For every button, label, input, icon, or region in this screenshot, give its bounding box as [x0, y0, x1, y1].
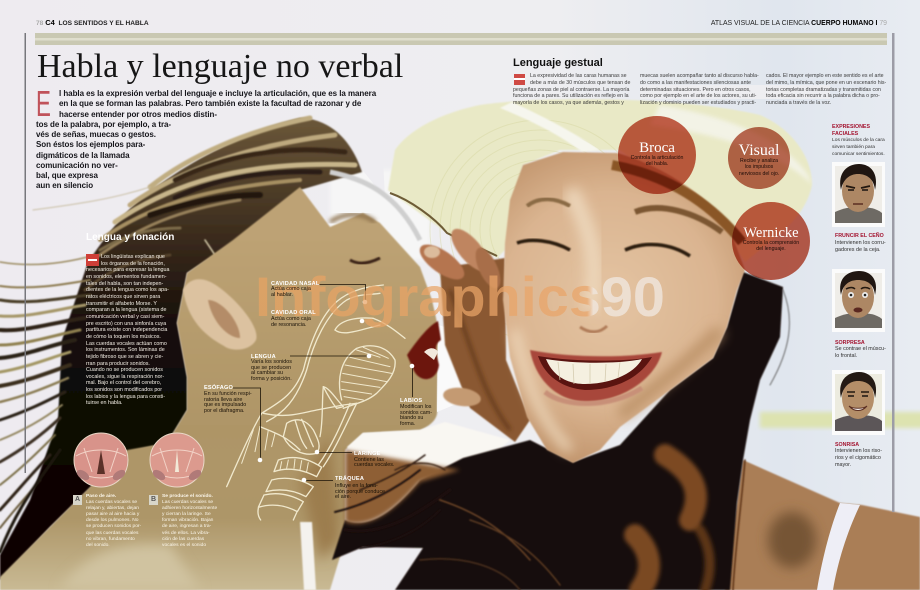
name: LABIOS	[400, 398, 422, 404]
description	[835, 240, 886, 253]
text column 1: mayoría de los casos, ya que además, gestos y	[513, 100, 624, 106]
body text: Cuando no se producen sonidos	[86, 367, 163, 373]
caption: fruncir el ceño	[835, 232, 886, 253]
description: ción porque conduce	[335, 489, 385, 495]
name: LENGUA	[251, 354, 276, 360]
name: ESÓFAGO	[204, 385, 233, 391]
left woman: face and neck	[0, 172, 510, 590]
right woman: hat	[330, 85, 830, 340]
text column 3: del mimo, la mímica, que pone en un escenario his-	[766, 80, 886, 86]
lips	[407, 321, 441, 379]
description: cuerdas vocales.	[354, 462, 394, 468]
caption: sorpresa	[835, 340, 887, 362]
description: Recibe y analiza	[740, 158, 778, 164]
text: vocales es el sonido	[162, 543, 206, 548]
intro text: aun en silencio	[36, 181, 93, 190]
sidebar heading: FACIALES	[832, 131, 858, 137]
heading: Lengua y fonación	[86, 232, 174, 243]
hair strands brown	[635, 455, 710, 590]
icon: red arrow square	[86, 254, 99, 266]
hat band	[612, 165, 742, 242]
text column 3: torias completas dramatizadas y transmitidas con	[766, 87, 881, 93]
header left: 78 C4 LOS SENTIDOS Y EL HABLA	[36, 18, 149, 27]
anatomy label: laringe	[354, 451, 394, 468]
name: SONRISA	[835, 442, 859, 448]
body text: Las cuerdas vocales actúan como	[86, 341, 167, 347]
icon: letter B: B	[151, 496, 156, 503]
panel: lengua y fonación	[86, 232, 174, 406]
description	[271, 286, 311, 298]
text column 2: como por ejemplo en el arte de los actores, su uti-	[640, 93, 756, 99]
white gaps	[437, 325, 466, 412]
description: de resonancia.	[271, 322, 306, 328]
description: Influye en la fona-	[335, 483, 378, 489]
leader lines and dots	[233, 284, 414, 482]
photo: smiling man	[832, 370, 885, 435]
text: ción de las cuerdas	[162, 537, 204, 542]
intro text: comunicación no ver-	[36, 161, 118, 170]
text column 1: pequeñas zonas de piel al contraerse. La mayoría	[513, 87, 629, 93]
description	[271, 316, 311, 328]
text column 1: La expresividad de las caras humanas se	[530, 73, 627, 79]
text column 1: funciona de a pares. Su utilización es reflejo en la	[513, 93, 629, 99]
body text: pre escrito) con una sinfonía cuya	[86, 321, 166, 327]
body text: transmitir el alfabeto Morse. Y	[86, 301, 157, 307]
description: Controla la articulación	[631, 155, 683, 161]
description	[335, 483, 385, 500]
closed eye and brow	[350, 258, 380, 263]
header right: ATLAS VISUAL DE LA CIENCIA CUERPO HUMANO I 79	[711, 20, 887, 27]
text: y cierran la laringe. Se	[162, 512, 211, 517]
text: vés de ellos. La vibra-	[162, 531, 210, 536]
description: que es impulsado	[204, 402, 246, 408]
text: pasar aire al aire hacia y	[86, 512, 139, 517]
silver hair over forehead	[330, 172, 420, 240]
description: Actúa como caja	[271, 316, 311, 322]
body text: Los lingüistas explican que	[101, 254, 165, 260]
name: SORPRESA	[835, 340, 865, 346]
text: del sonido.	[86, 543, 110, 548]
body text: vocales, sigue la respiración nor-	[86, 374, 164, 380]
page frame rules	[24, 33, 894, 512]
text column 2: lización y dominio pueden ser estudiados y practi-	[640, 100, 756, 106]
description: ratoria lleva aire	[204, 397, 242, 403]
throat circle A: open vocal cords	[74, 433, 128, 487]
heading: Lenguaje gestual	[513, 57, 603, 69]
body text: en sonidos, elementos fundamen-	[86, 274, 167, 280]
anatomy drawing: vocal tract	[227, 285, 405, 520]
text: desde los pulmones. No	[86, 518, 138, 523]
description: mayor.	[835, 462, 851, 468]
left woman: wind-blown strands	[0, 255, 95, 552]
panel: lenguaje gestual	[513, 57, 886, 106]
body text: los sonidos son modificados por	[86, 387, 162, 393]
sidebar heading: EXPRESIONES	[832, 124, 870, 130]
text: Paso de aire.	[86, 494, 116, 499]
text: de aire, ingresan a tra-	[162, 524, 211, 529]
body text: tejido fibroso que se abren y cie-	[86, 354, 163, 360]
caption: sonrisa	[835, 442, 887, 471]
body text: los instrumentos. Son láminas de	[86, 347, 165, 353]
description: forma y posición.	[251, 376, 292, 382]
white strap	[300, 522, 316, 590]
text: adhieren horizontalmente	[162, 506, 217, 511]
body text: dientes de la lengua como los apa-	[86, 287, 169, 293]
intro text: en la que se forman las palabras. Pero también existe la facultad de razonar y de	[59, 99, 361, 108]
description: sonidos cam-	[400, 410, 432, 416]
text: no vibran, fundamento	[86, 537, 135, 542]
description: el aire.	[335, 494, 351, 500]
anatomy label: cavidad nasal	[271, 281, 320, 298]
body text	[86, 254, 170, 406]
photo: frowning man	[832, 162, 885, 227]
description: Controla la comprensión	[743, 240, 799, 246]
body text: rran para producir sonidos.	[86, 360, 150, 366]
text column 3: cados. El mayor ejemplo en este sentido es el arte	[766, 73, 884, 79]
body text: tales del habla, son tan indepen-	[86, 281, 163, 287]
right woman: face, hand and hair	[332, 152, 920, 590]
body text: comparan a la lengua (sistema de	[86, 307, 166, 313]
description	[630, 155, 684, 167]
circle label: Visual	[738, 142, 780, 177]
description: Modifican los	[400, 404, 431, 410]
anatomy label: lengua	[251, 354, 292, 382]
name: LARINGE	[354, 451, 381, 457]
description: que se producen	[251, 365, 291, 371]
text column 2: do como a las manifestaciones silenciosas ante	[640, 80, 751, 86]
text: Las cuerdas vocales se	[162, 500, 213, 505]
drop cap: E	[36, 83, 51, 124]
icon: red arrow square	[514, 74, 525, 85]
description	[400, 404, 432, 427]
text: Las cuerdas vocales se	[86, 500, 137, 505]
description: En su función respi-	[204, 391, 252, 397]
text: Se produce el sonido.	[162, 494, 213, 499]
text column 3	[766, 73, 886, 106]
photo: surprised man	[832, 269, 885, 332]
text column 2	[640, 73, 759, 106]
description: al hablar.	[271, 292, 293, 298]
circle label: Wernicke	[743, 225, 799, 252]
body text: necesarios para expresar la lengua	[86, 267, 169, 273]
name: Broca	[639, 140, 675, 156]
name: FRUNCIR EL CEÑO	[835, 233, 884, 239]
description: del habla.	[646, 161, 668, 167]
icon: letter A	[73, 495, 82, 505]
body text: los órganos de la fonación,	[101, 261, 165, 267]
description: Contiene las	[354, 456, 384, 462]
text: forman vibración. Bajan	[162, 518, 213, 523]
body text: los labios y la lengua para consti-	[86, 394, 165, 400]
icon: letter B	[149, 495, 158, 505]
description: del lenguaje.	[756, 246, 786, 252]
text column 3: toda eficacia sin recurrir a la palabra dicha o pro-	[766, 93, 880, 99]
body text: comunicación verbal y casi siem-	[86, 314, 164, 320]
body text: mal. Bajo el control del cerebro,	[86, 380, 161, 386]
text column 3: nunciada a través de la voz.	[766, 100, 831, 106]
ear	[183, 279, 257, 350]
text column 1	[513, 73, 630, 106]
intro text: hacerse entender por otros medios distin-	[59, 110, 217, 118]
name: CAVIDAD NASAL	[271, 281, 320, 287]
description: gadores de la ceja.	[835, 247, 881, 253]
sidebar intro: sirven también para	[832, 145, 875, 150]
description: forma.	[400, 421, 415, 427]
text	[86, 494, 141, 548]
sidebar intro	[832, 138, 885, 157]
anatomy label: cavidad oral	[271, 310, 316, 328]
description: por el diafragma.	[204, 408, 244, 414]
intro text: vés de señas, muecas o gestos.	[36, 130, 156, 139]
text column 2: determinadas situaciones. Pero en otros casos,	[640, 87, 751, 93]
body text: ratos eléctricos que sirven para	[86, 294, 160, 300]
text	[162, 494, 217, 548]
description: nerviosos del ojo.	[739, 171, 779, 177]
anatomy label: labios	[400, 398, 432, 427]
name: Wernicke	[743, 225, 799, 241]
description	[204, 391, 252, 414]
intro text: tos de la palabra, por ejemplo, a tra-	[36, 120, 171, 129]
hand	[440, 258, 530, 442]
title: Habla y lenguaje no verbal	[37, 48, 403, 85]
description	[743, 240, 799, 252]
description	[739, 158, 779, 177]
circle label: Broca	[630, 140, 684, 167]
caption A: paso de aire	[73, 494, 141, 548]
brows and eyes	[635, 208, 722, 232]
description: Intervienen los riso-	[835, 448, 882, 454]
throat circle B: closed vocal cords	[150, 433, 204, 487]
sidebar heading	[832, 124, 870, 137]
nose	[580, 326, 607, 332]
anatomy label: esófago	[204, 384, 252, 414]
description: biando su	[400, 415, 423, 421]
hair and neck mass	[332, 272, 783, 590]
brain area circles	[618, 116, 810, 280]
sidebar intro: Los músculos de la cara	[832, 138, 885, 143]
description: Actúa como caja	[271, 286, 311, 292]
description: rios y el cigomático	[835, 455, 881, 461]
intro text: digmáticos de la llamada	[36, 150, 130, 160]
text column 1: debe a más de 30 músculos que tensan de	[530, 80, 630, 86]
description	[251, 359, 292, 382]
intro text: l habla es la expresión verbal del lenguaje e incluye la articulación, que es la manera	[59, 89, 376, 98]
description: los impulsos	[745, 164, 773, 170]
description	[835, 448, 882, 468]
sidebar intro: comunicar sentimientos.	[832, 152, 885, 157]
panel: expresiones faciales	[832, 124, 886, 468]
text: se producen sonidos por-	[86, 524, 141, 529]
shoulder	[725, 460, 920, 590]
name: Visual	[739, 142, 779, 159]
text: relajan y, abiertas, dejan	[86, 506, 139, 511]
description: Intervienen los corru-	[835, 240, 886, 246]
left woman: hair	[0, 118, 362, 580]
icon: letter A: A	[75, 496, 80, 503]
description	[835, 346, 886, 360]
face	[503, 152, 745, 463]
text: que las cuerdas vocales	[86, 531, 138, 536]
description: Varía los sonidos	[251, 359, 292, 365]
name: TRÁQUEA	[335, 476, 364, 482]
watermark: Infographics90	[255, 265, 665, 328]
name: CAVIDAD ORAL	[271, 310, 316, 316]
description	[354, 456, 394, 468]
description: lo frontal.	[835, 353, 857, 359]
intro text: bal, que expresa	[36, 171, 98, 180]
mouth	[530, 350, 662, 402]
description: al cambiar su	[251, 370, 283, 376]
text column 2: muecas suelen acompañar tanto al discurso habla-	[640, 73, 759, 79]
body text: de cómo la toquen los músicos.	[86, 334, 161, 340]
intro text: Son éstos los ejemplos para-	[36, 140, 145, 149]
intro text	[36, 89, 376, 190]
anatomy label: tráquea	[335, 475, 385, 500]
body text: partitura existe con independencia	[86, 327, 167, 333]
caption B: se produce el sonido	[149, 494, 217, 548]
description: Se contrae el múscu-	[835, 346, 886, 352]
body text: tuirse en habla.	[86, 400, 123, 406]
